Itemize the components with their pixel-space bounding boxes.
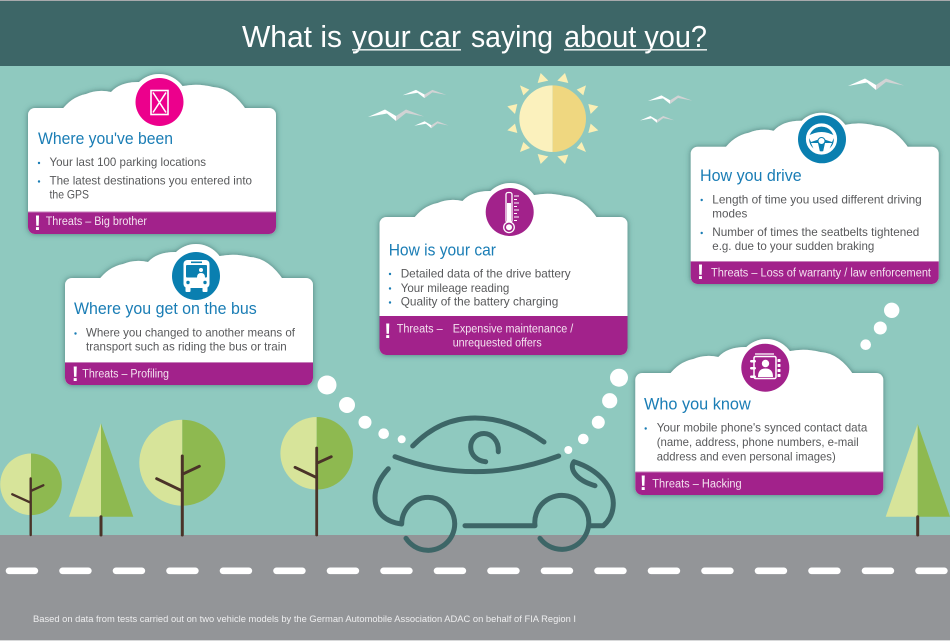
title bar: What is [242, 19, 342, 54]
panel: how is your car: Quality of the battery charging [401, 295, 558, 309]
tree 2 [69, 423, 133, 535]
title bar: saying [471, 19, 553, 54]
panel: where you get on the bus: Threats – Profiling [82, 368, 169, 380]
thought bubbles [318, 303, 899, 454]
icon: thermometer [486, 188, 534, 236]
icon: steering wheel [798, 115, 846, 163]
panel: where you get on the bus [65, 244, 313, 386]
title bar [0, 0, 950, 66]
sun [507, 73, 598, 164]
panel: how you drive [691, 113, 939, 284]
panel: how you drive: Threats – Loss of warranty / law enforcement [711, 268, 932, 280]
panel: how is your car: How is your car [389, 240, 496, 259]
panel: how is your car: unrequested offers [453, 338, 542, 350]
panel: where you get on the bus: ! [72, 363, 79, 386]
panel: how you drive: ! [697, 261, 704, 284]
icon: contact book [741, 344, 789, 392]
panel: where you've been [28, 74, 276, 235]
panel: how you drive: e.g. due to your sudden braking [712, 239, 874, 253]
panel: where you've been: ! [34, 212, 41, 235]
panel: how is your car [380, 183, 628, 355]
icon: bus [172, 252, 220, 300]
panel: how you drive: Number of times the seatbelts tightened [712, 225, 919, 239]
road [0, 535, 950, 641]
title bar: about you? [564, 19, 707, 54]
panel: where you get on the bus: transport such as riding the bus or train [86, 340, 287, 354]
panel: how you drive: modes [712, 206, 747, 220]
panel: how is your car: Expensive maintenance / [453, 324, 574, 336]
title bar: your car [352, 19, 461, 54]
tree 1 [0, 454, 62, 535]
panel: who you know: (name, address, phone numbers, e-mail [657, 435, 859, 449]
icon: map [136, 78, 184, 126]
panel: who you know: Your mobile phone's synced contact data [657, 421, 868, 435]
panel: who you know: Who you know [644, 394, 751, 413]
panel: who you know: Threats – Hacking [652, 478, 742, 490]
tree 5 [886, 424, 950, 535]
panel: where you've been: The latest destinations you entered into [50, 174, 252, 188]
panel: how is your car: Threats – [397, 324, 443, 336]
panel: how is your car: ! [384, 320, 391, 343]
tree 4 [280, 417, 353, 535]
footnote: Based on data from tests carried out on two vehicle models by the German Automobile Association ADAC on behalf of FIA Region I [33, 614, 576, 625]
panel: where you've been: Where you've been [38, 129, 173, 148]
panel: where you get on the bus: Where you get on the bus [74, 299, 257, 318]
tree 3 [139, 420, 225, 535]
panel: how you drive: How you drive [700, 166, 802, 185]
panel: how is your car: Detailed data of the drive battery [401, 266, 571, 280]
panel: how you drive: Length of time you used different driving [712, 192, 922, 206]
car line drawing [375, 418, 613, 550]
panel: who you know: ! [640, 472, 647, 495]
panel: where you get on the bus: Where you changed to another means of [86, 326, 296, 340]
panel: where you've been: Your last 100 parking locations [50, 155, 206, 169]
panel: who you know [635, 339, 883, 495]
panel: how is your car: Your mileage reading [401, 281, 509, 295]
birds [368, 78, 904, 128]
panel: where you've been: Threats – Big brother [46, 216, 147, 228]
panel: where you've been: the GPS [50, 187, 89, 201]
panel: who you know: address and even personal images) [657, 449, 836, 463]
